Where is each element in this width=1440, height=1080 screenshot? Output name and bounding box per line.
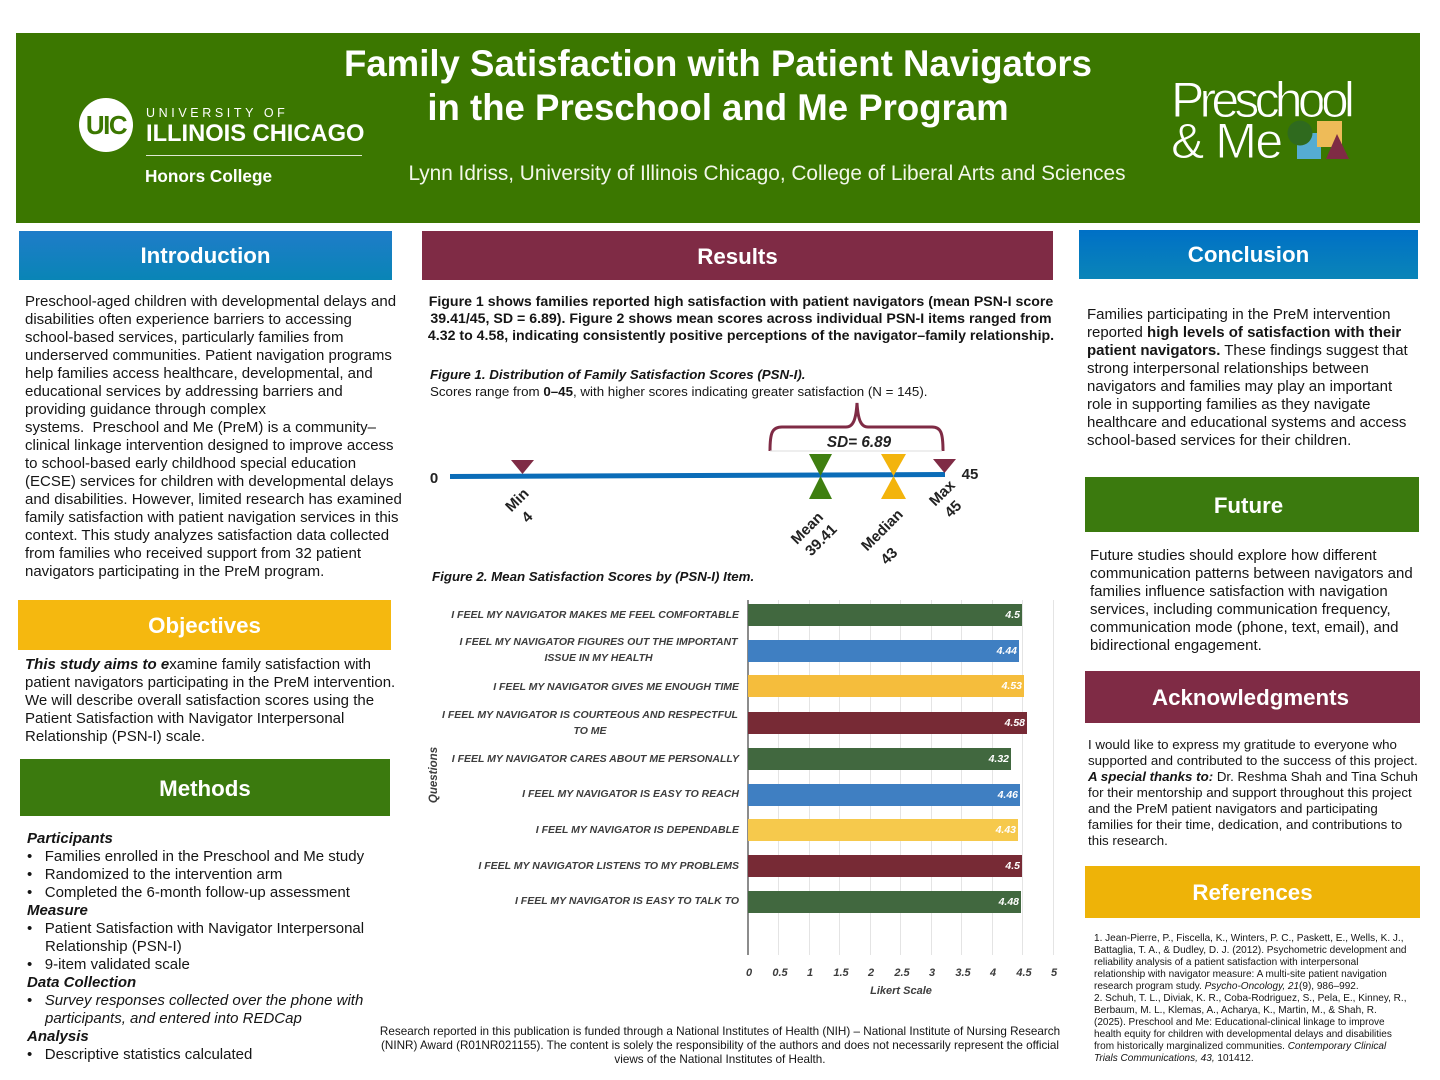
SD bracket: SD= 6.89 — [827, 434, 892, 451]
value: 4.58: 4.58 — [1005, 717, 1025, 729]
icon: UIC circle — [79, 98, 133, 152]
heading: Methods: Methods — [159, 776, 251, 800]
question label 6: I FEEL MY NAVIGATOR IS EASY TO REACH — [522, 788, 739, 800]
text: conclusion body: navigators and families may play an important — [1087, 378, 1392, 395]
text: introduction body: to school-based early childhood special education — [25, 455, 356, 472]
heading: Objectives — [18, 600, 391, 650]
text: references list: Berbaum, M. L., Klemas, A., Acharya, K., Martin, M., & Shah, R. — [1094, 1005, 1377, 1016]
panel: acknowledgments — [1085, 671, 1420, 848]
value: 4.5: 4.5 — [1005, 860, 1020, 872]
text: conclusion body: role in supporting families as they navigate — [1087, 396, 1370, 413]
text: introduction body: from families who received support from 32 patient — [25, 545, 361, 562]
logo divider — [146, 155, 362, 156]
bar: listens — [748, 855, 1022, 877]
text: conclusion body: reported high levels of satisfaction with their — [1087, 324, 1401, 341]
heading: Future — [1085, 477, 1419, 532]
text: figure 2 caption: Figure 2. Mean Satisfaction Scores by (PSN-I) Item. — [432, 569, 754, 584]
text: references list: Trials Communications, 43, 101412. — [1094, 1053, 1254, 1064]
bar: easy to talk to — [748, 891, 1021, 913]
text: introduction body: (ECSE) services for children with developmental delays — [25, 473, 394, 490]
question label 9: I FEEL MY NAVIGATOR IS EASY TO TALK TO — [515, 895, 739, 907]
x axis tick labels: 3.5 — [955, 967, 971, 979]
author line: Lynn Idriss, University of Illinois Chicago, College of Liberal Arts and Sciences — [408, 162, 1126, 185]
marker: median — [881, 454, 906, 499]
text: acknowledgments body: supported and contributed to the success of this project. — [1088, 753, 1418, 768]
text: conclusion body: school-based services for their children. — [1087, 432, 1351, 449]
text: results summary — [428, 294, 1054, 344]
x axis tick labels: 2.5 — [894, 967, 910, 979]
text: results summary: 39.41/45, SD = 6.89). Figure 2 shows mean scores across individual PSN-I items ranged from — [430, 311, 1052, 327]
icon: UIC circle: UIC — [86, 110, 126, 140]
axis label: 45: 45 — [962, 466, 978, 483]
x axis tick labels: 3 — [929, 967, 935, 979]
x axis tick labels: 1 — [807, 967, 813, 979]
logo text: Honors College: Honors College — [145, 166, 272, 186]
text: acknowledgments body — [1088, 737, 1418, 848]
panel: methods — [20, 759, 390, 1063]
label: min — [502, 485, 537, 526]
text: references list: 2. Schuh, T. L., Diviak, K. R., Coba-Rodriguez, S., Pela, E., Kinney, R., — [1094, 993, 1406, 1004]
heading: Acknowledgments: Acknowledgments — [1152, 685, 1349, 710]
text: methods body: Data Collection — [27, 974, 136, 991]
title: Family Satisfaction with Patient Navigators — [344, 43, 1092, 84]
text: figure 1 caption: Scores range from 0–45, with higher scores indicating greater satisfaction (N = 145). — [430, 384, 927, 398]
text: references list: relationship with navigator measure: A multi-site patient navigation — [1094, 969, 1387, 980]
text: references list: health equity for children with developmental delays and disabilities — [1094, 1029, 1392, 1040]
text: conclusion body — [1087, 306, 1408, 449]
question label 2: ISSUE IN MY HEALTH — [544, 652, 653, 664]
panel: references — [1085, 866, 1420, 1064]
text: methods body: • Survey responses collected over the phone with — [27, 992, 363, 1009]
x axis tick labels: 4 — [990, 967, 996, 979]
panel: conclusion — [1079, 230, 1418, 449]
text: conclusion body: Families participating in the PreM intervention — [1087, 306, 1390, 323]
text: acknowledgments body: families for their time, dedication, and contributions to — [1088, 817, 1402, 832]
text: introduction body: family satisfaction with patient navigation services in this — [25, 509, 399, 526]
question label 7: I FEEL MY NAVIGATOR IS DEPENDABLE — [536, 824, 739, 836]
text: methods body: • Completed the 6-month follow-up assessment — [27, 884, 350, 901]
text: methods body: • Families enrolled in the Preschool and Me study — [27, 848, 364, 865]
text: introduction body: underserved communities. Patient navigation programs — [25, 347, 392, 364]
label: median: 43 — [877, 544, 901, 568]
text: funding statement: views of the National Institutes of Health. — [614, 1053, 826, 1066]
heading: Results: Results — [697, 244, 778, 268]
title — [344, 43, 1092, 128]
y axis title: Questions — [428, 747, 440, 803]
text: methods body: Participants — [27, 830, 113, 847]
chart: mean satisfaction bar chart — [778, 600, 1054, 955]
value: 4.5: 4.5 — [1005, 609, 1020, 621]
panel: objectives — [18, 600, 395, 745]
text: methods body: Relationship (PSN-I) — [45, 938, 182, 955]
text: conclusion body: strong interpersonal relationships between — [1087, 360, 1369, 377]
bar: comfortable — [748, 604, 1022, 626]
label: mean: 39.41 — [802, 521, 841, 560]
value: 4.44: 4.44 — [997, 645, 1017, 657]
value: 4.48: 4.48 — [999, 896, 1019, 908]
text: introduction body: help families access healthcare, developmental, and — [25, 365, 373, 382]
text: objectives body: This study aims to examine family satisfaction with — [25, 656, 371, 673]
text: references list — [1094, 933, 1406, 1064]
label: max — [926, 477, 965, 521]
value: 4.43: 4.43 — [996, 824, 1016, 836]
axis label: 0: 0 — [430, 470, 438, 487]
question label 4: I FEEL MY NAVIGATOR IS COURTEOUS AND RESPECTFUL — [442, 709, 738, 721]
text: references list: from historically marginalized communities. Contemporary Clinical — [1094, 1041, 1386, 1052]
heading: References: References — [1192, 880, 1313, 905]
text: objectives body: Relationship (PSN-I) scale. — [25, 728, 205, 745]
logo text: Illinois Chicago: ILLINOIS CHICAGO — [146, 121, 364, 147]
text: references list: Battaglia, T. A., & Dudley, D. J. (2012). Psychometric development and — [1094, 945, 1406, 956]
heading: Acknowledgments — [1085, 671, 1420, 723]
question label 2 — [459, 636, 738, 664]
value: 4.46: 4.46 — [998, 789, 1018, 801]
heading: References — [1085, 866, 1420, 918]
text: introduction body: educational services by addressing barriers and — [25, 383, 343, 400]
x axis tick labels: 4.5 — [1016, 967, 1032, 979]
text: references list: 1. Jean-Pierre, P., Fiscella, K., Winters, P. C., Paskett, E., Wells, K. J., — [1094, 933, 1403, 944]
question label 1: I FEEL MY NAVIGATOR MAKES ME FEEL COMFORTABLE — [451, 609, 739, 621]
text: funding statement — [380, 1025, 1060, 1066]
text: methods body — [26, 830, 364, 1063]
question label 2: I FEEL MY NAVIGATOR FIGURES OUT THE IMPORTANT — [459, 636, 738, 648]
title: in the Preschool and Me Program — [427, 87, 1009, 128]
x axis tick labels: 2 — [868, 967, 874, 979]
label: min: 4 — [518, 508, 537, 526]
text: references list: research program study. Psycho-Oncology, 21(9), 986–992. — [1094, 981, 1359, 992]
text: introduction body: school-based services, particularly families from — [25, 329, 343, 346]
text: objectives body — [25, 656, 395, 745]
text: figure 1 caption — [430, 367, 927, 398]
question label 8: I FEEL MY NAVIGATOR LISTENS TO MY PROBLEMS — [478, 860, 739, 872]
heading: Introduction — [19, 231, 392, 280]
icon: logo shapes — [1288, 120, 1349, 159]
label: mean: Mean — [788, 509, 827, 548]
x axis tick labels: 1.5 — [833, 967, 849, 979]
text: future body: bidirectional engagement. — [1090, 637, 1262, 654]
text: introduction body — [25, 293, 402, 580]
value: 4.32: 4.32 — [989, 753, 1009, 765]
label: median: Median — [858, 506, 907, 555]
logo text: and Me: & Me — [1171, 113, 1282, 169]
text: future body — [1090, 547, 1413, 654]
text: introduction body: providing guidance through complex — [25, 401, 266, 418]
heading: Conclusion: Conclusion — [1188, 242, 1309, 266]
text: future body: Future studies should explore how different — [1090, 547, 1377, 564]
text: introduction body: context. This study analyzes satisfaction data collected — [25, 527, 389, 544]
label: min: Min — [502, 485, 532, 515]
label: max: Max — [926, 477, 959, 510]
x axis tick labels: 5 — [1051, 967, 1057, 979]
text: methods body: • Patient Satisfaction with Navigator Interpersonal — [27, 920, 364, 937]
text: conclusion body: patient navigators. These findings suggest that — [1087, 342, 1408, 359]
x axis tick labels: 0.5 — [772, 967, 788, 979]
header banner — [16, 33, 1420, 223]
text: conclusion body: healthcare and educational systems and access — [1087, 414, 1406, 431]
text: methods body: • Descriptive statistics calculated — [27, 1046, 252, 1063]
heading: Conclusion — [1079, 230, 1418, 279]
text: acknowledgments body: and the PreM patient navigators and participating — [1088, 801, 1378, 816]
bar: dependable — [748, 819, 1018, 841]
heading: Methods — [20, 759, 390, 816]
bar: easy to reach — [748, 784, 1020, 806]
text: future body: services, including communication frequency, — [1090, 601, 1391, 618]
marker: mean — [809, 454, 832, 499]
question label 5: I FEEL MY NAVIGATOR CARES ABOUT ME PERSONALLY — [452, 753, 739, 765]
axis line — [450, 474, 945, 476]
value: 4.53: 4.53 — [1002, 680, 1022, 692]
text: acknowledgments body: this research. — [1088, 833, 1168, 848]
chart: score distribution timeline — [430, 402, 978, 568]
text: introduction body: Preschool-aged children with developmental delays and — [25, 293, 396, 310]
text: acknowledgments body: I would like to express my gratitude to everyone who — [1088, 737, 1397, 752]
text: future body: families influence satisfaction with navigation — [1090, 583, 1388, 600]
bar: enough time — [748, 675, 1024, 697]
text: methods body: Measure — [27, 902, 88, 919]
logo text: Preschool: Preschool — [1171, 72, 1350, 128]
text: objectives body: patient navigators participating in the PreM intervention. — [25, 674, 395, 691]
x axis tick labels: 0 — [746, 967, 752, 979]
heading: Introduction: Introduction — [140, 243, 271, 268]
text: future body: communication patterns between navigators and — [1090, 565, 1413, 582]
panel: results — [422, 231, 1054, 398]
question label 4: TO ME — [573, 725, 607, 737]
text: methods body: • Randomized to the intervention arm — [27, 866, 282, 883]
x axis tick labels — [746, 967, 1058, 979]
text: funding statement: Research reported in this publication is funded through a National Institutes of Health (NIH) – National Institute of Nursing Research — [380, 1025, 1060, 1038]
text: results summary: 4.32 to 4.58, indicating consistently positive perceptions of the navigator–family relationship. — [428, 328, 1054, 344]
text: methods body: • 9-item validated scale — [27, 956, 190, 973]
text: acknowledgments body: for their mentorship and support throughout this project — [1088, 785, 1412, 800]
marker: min — [511, 460, 534, 474]
x axis title: Likert Scale — [870, 985, 932, 997]
SD bracket — [770, 403, 943, 451]
bar: courteous — [748, 712, 1027, 734]
logo: Preschool and Me — [1171, 72, 1352, 169]
heading: Results — [422, 231, 1053, 280]
text: introduction body: navigators participating in the PreM program. — [25, 563, 324, 580]
text: references list: reliability analysis of a patient satisfaction with interpersonal — [1094, 957, 1358, 968]
text: funding statement: (NINR) Award (R01NR021155). The content is solely the responsibility of the authors and does not necessarily represent the official — [381, 1039, 1059, 1052]
panel: introduction — [19, 231, 402, 580]
y axis line — [747, 600, 749, 955]
text: results summary: Figure 1 shows families reported high satisfaction with patient navigators (mean PSN-I score — [429, 294, 1053, 310]
text: introduction body: disabilities often experience barriers to accessing — [25, 311, 352, 328]
text: methods body: Analysis — [27, 1028, 89, 1045]
text: objectives body: We will describe overall satisfaction scores using the — [25, 692, 374, 709]
marker: max — [933, 459, 956, 473]
text: references list: (2025). Preschool and Me: Educational-clinical linkage to improve — [1094, 1017, 1385, 1028]
text: methods body: participants, and entered into REDCap — [45, 1010, 302, 1027]
text: future body: communication mode (phone, text, email), and — [1090, 619, 1398, 636]
heading: Objectives: Objectives — [148, 613, 261, 638]
label: max: 45 — [941, 497, 965, 521]
text: objectives body: Patient Satisfaction with Navigator Interpersonal — [25, 710, 344, 727]
logo: UIC Honors College — [79, 98, 364, 186]
label: mean — [788, 509, 841, 560]
question label 4 — [442, 709, 738, 737]
bar: cares personally — [748, 748, 1011, 770]
text: figure 1 caption: Figure 1. Distribution of Family Satisfaction Scores (PSN-I). — [430, 367, 805, 382]
question label 3: I FEEL MY NAVIGATOR GIVES ME ENOUGH TIME — [493, 681, 739, 693]
text: introduction body: and disabilities. However, limited research has examined — [25, 491, 402, 508]
panel: future — [1085, 477, 1419, 654]
heading: Future: Future — [1214, 492, 1283, 518]
text: acknowledgments body: A special thanks to: Dr. Reshma Shah and Tina Schuh — [1088, 769, 1418, 784]
text: introduction body: systems. Preschool and Me (PreM) is a community– — [25, 419, 376, 436]
text: introduction body: clinical linkage intervention designed to improve access — [25, 437, 394, 454]
bar: important issue — [748, 640, 1019, 662]
logo text: University of: UNIVERSITY OF — [146, 106, 288, 120]
